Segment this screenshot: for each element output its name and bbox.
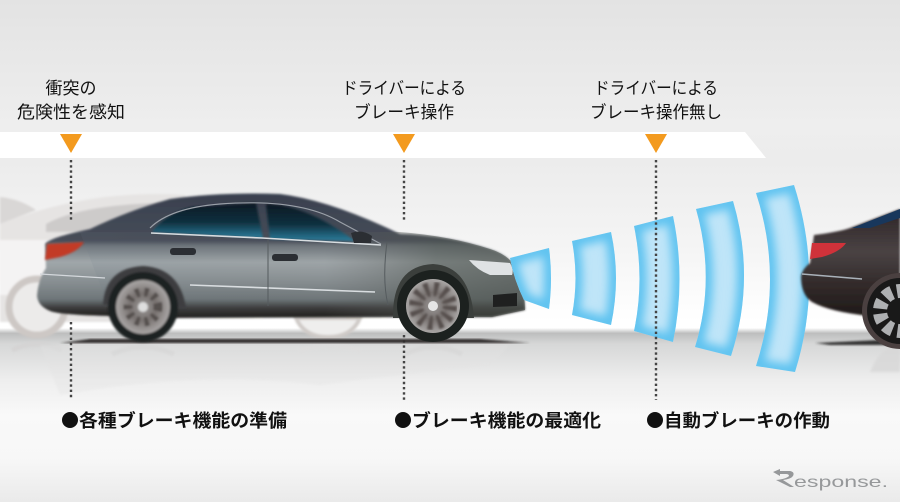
- label: driver braking: ブレーキ操作: [354, 102, 454, 122]
- label: driver braking: [342, 79, 466, 122]
- door lines: [268, 240, 388, 306]
- car ahead ground shadow: [815, 339, 900, 345]
- car ahead tail lamp: [810, 243, 846, 259]
- caption: prepare brake functions: 各種ブレーキ機能の準備: [79, 410, 287, 431]
- label: collision risk detected: [17, 79, 125, 122]
- marker 2: [393, 134, 415, 153]
- caption: optimize brake function: ブレーキ機能の最適化: [412, 410, 601, 431]
- grille: [493, 293, 517, 307]
- dotted guide line 2: [403, 160, 405, 400]
- car ahead wheel: [862, 273, 900, 349]
- side windows: [150, 203, 381, 245]
- headlamp: [469, 260, 513, 275]
- reflections: [12, 342, 900, 395]
- ghost cars behind the main car: [0, 194, 360, 337]
- car body: [37, 194, 525, 318]
- floor: [0, 328, 900, 502]
- car ahead trim: [802, 274, 862, 279]
- rear wheel: [103, 266, 186, 342]
- marker 3: [645, 134, 667, 153]
- radar wave 3: [634, 216, 680, 342]
- car ahead window: [852, 209, 900, 228]
- label: driver braking: ドライバーによる: [342, 79, 466, 98]
- dotted guide line 1: [70, 160, 72, 400]
- car ahead: [801, 209, 900, 349]
- banner: timeline strip: [0, 132, 766, 158]
- front wheel: [393, 264, 474, 342]
- car ahead body: [801, 209, 900, 316]
- label: no driver braking: ブレーキ操作無し: [590, 102, 722, 122]
- radar wave 1: [510, 248, 551, 309]
- radar wave 4: [695, 201, 744, 356]
- radar wave 5: [756, 185, 809, 372]
- dotted guide line 3: [655, 160, 657, 400]
- label: no driver braking: ドライバーによる: [594, 79, 718, 98]
- marker 1: [60, 134, 82, 153]
- label: collision risk detected: 衝突の: [46, 79, 96, 98]
- caption: automatic brake activation: 自動ブレーキの作動: [664, 410, 830, 431]
- label: collision risk detected: 危険性を感知: [17, 103, 125, 122]
- label: no driver braking: [590, 79, 722, 122]
- ground shadow: [60, 339, 530, 343]
- tail lamp: [45, 242, 84, 260]
- front body tone: [80, 232, 525, 317]
- logo: Response: [773, 469, 888, 491]
- radar wave 2: [572, 232, 616, 325]
- main car: [37, 194, 530, 343]
- character line: [190, 285, 375, 292]
- door handles and mirror: [170, 232, 372, 261]
- logo: Response: esponse.: [794, 474, 888, 491]
